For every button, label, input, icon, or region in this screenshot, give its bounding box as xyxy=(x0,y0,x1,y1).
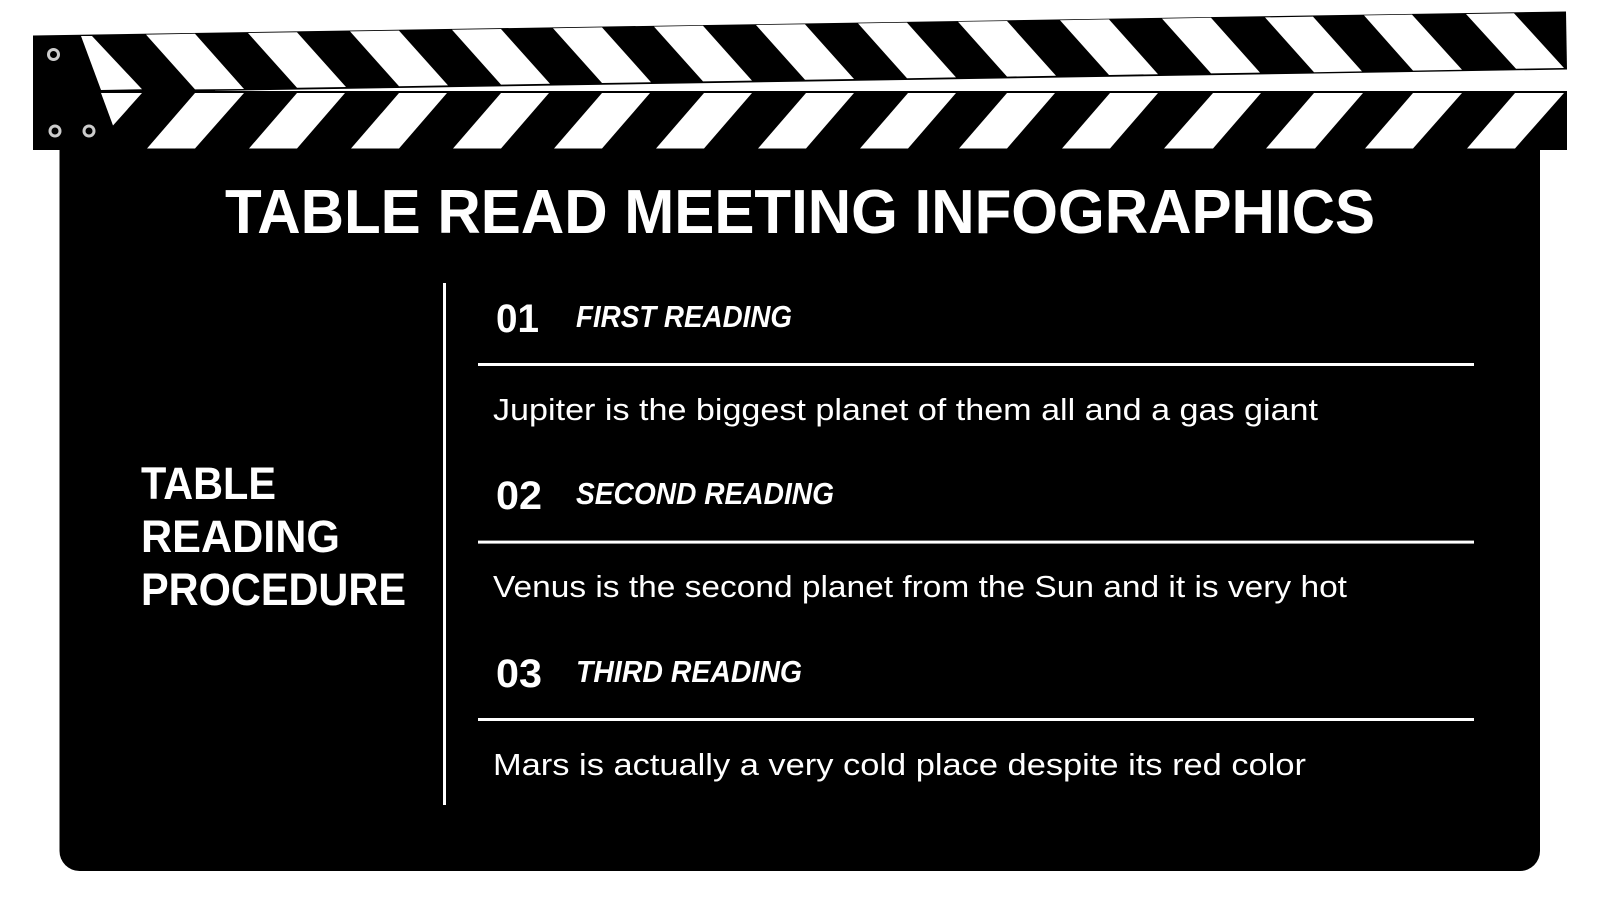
reading 03 xyxy=(478,652,1474,782)
reading 02 xyxy=(478,474,1474,604)
side heading: READING xyxy=(141,511,340,562)
side heading: TABLE xyxy=(141,458,276,509)
reading 01 xyxy=(478,297,1474,427)
reading 01: FIRST READING xyxy=(576,299,792,334)
reading 02: SECOND READING xyxy=(576,476,834,511)
reading 01: 01 xyxy=(496,297,539,341)
title: TABLE READ MEETING INFOGRAPHICS xyxy=(225,178,1375,247)
lower and upper stick silhouette xyxy=(33,12,1567,150)
vertical divider xyxy=(443,283,446,805)
reading 03: THIRD READING xyxy=(576,654,802,689)
side heading xyxy=(141,458,406,615)
reading 02: 02 xyxy=(496,474,542,518)
clapperboard body xyxy=(60,145,1540,871)
reading 01: Jupiter is the biggest planet of them all and a gas giant xyxy=(493,392,1318,427)
side heading: PROCEDURE xyxy=(141,564,406,615)
lower stick stripes xyxy=(101,93,1564,148)
reading 03: 03 xyxy=(496,652,542,696)
reading 03: Mars is actually a very cold place despite its red color xyxy=(493,747,1306,782)
upper stick stripes xyxy=(81,13,1564,90)
clapper sticks xyxy=(33,12,1568,150)
hinge rivets xyxy=(48,50,94,136)
reading 02: Venus is the second planet from the Sun and it is very hot xyxy=(493,569,1347,604)
